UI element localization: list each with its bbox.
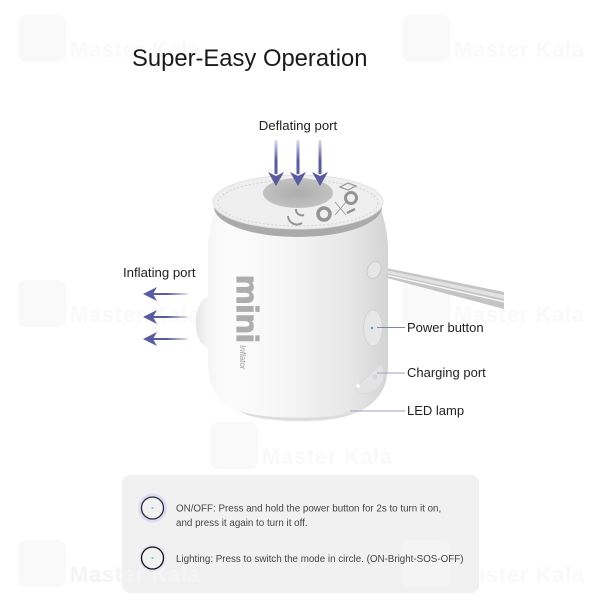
charging cable: [376, 266, 504, 309]
certification marks: [288, 183, 356, 225]
top disc: [213, 175, 383, 229]
device: [208, 175, 388, 422]
device base shadow: [240, 411, 354, 421]
watermarks: Master Kala: [454, 302, 585, 327]
icon: on/off button: [138, 494, 167, 522]
mini logo: mini: [230, 275, 265, 343]
watermarks: Master Kala: [454, 37, 585, 62]
label: inflating port: Inflating port: [123, 265, 196, 280]
arrows: deflating: [268, 140, 328, 186]
watermarks: Master Kala: [454, 562, 585, 587]
panel watermark: [70, 540, 450, 587]
device body: [208, 205, 388, 422]
text: lighting: Lighting: Press to switch the mode in circle. (ON-Bright-SOS-OFF): [176, 554, 463, 565]
charging port: [357, 364, 384, 394]
panel: instructions: [70, 475, 479, 593]
panel watermark: Master Kala: [70, 562, 201, 587]
text: on/off: ON/OFF: Press and hold the power button for 2s to turn it on,: [176, 504, 441, 514]
watermarks: Master Kala: [70, 302, 201, 327]
title: Super-Easy Operation: [132, 45, 367, 72]
arrows: inflating: [143, 287, 188, 346]
label: deflating port: Deflating port: [259, 118, 338, 133]
inflating port nozzle: [196, 296, 210, 348]
grey ring under disc: [214, 177, 382, 237]
text: on/off: and press it again to turn it off.: [176, 518, 308, 529]
icon: lighting button: [139, 544, 166, 572]
callouts: [350, 320, 486, 418]
air hole: [263, 178, 333, 208]
inflator text: Inflator: [238, 345, 247, 370]
callout: LED lamp: LED lamp: [407, 403, 464, 418]
watermarks: Master Kala: [262, 444, 393, 469]
watermarks: Master Kala: [70, 37, 201, 62]
callout: power button: Power button: [407, 320, 484, 335]
cable socket: [364, 259, 384, 281]
disc fine print: [218, 180, 378, 226]
callout: charging port: Charging port: [407, 365, 486, 380]
power button: [364, 310, 382, 346]
